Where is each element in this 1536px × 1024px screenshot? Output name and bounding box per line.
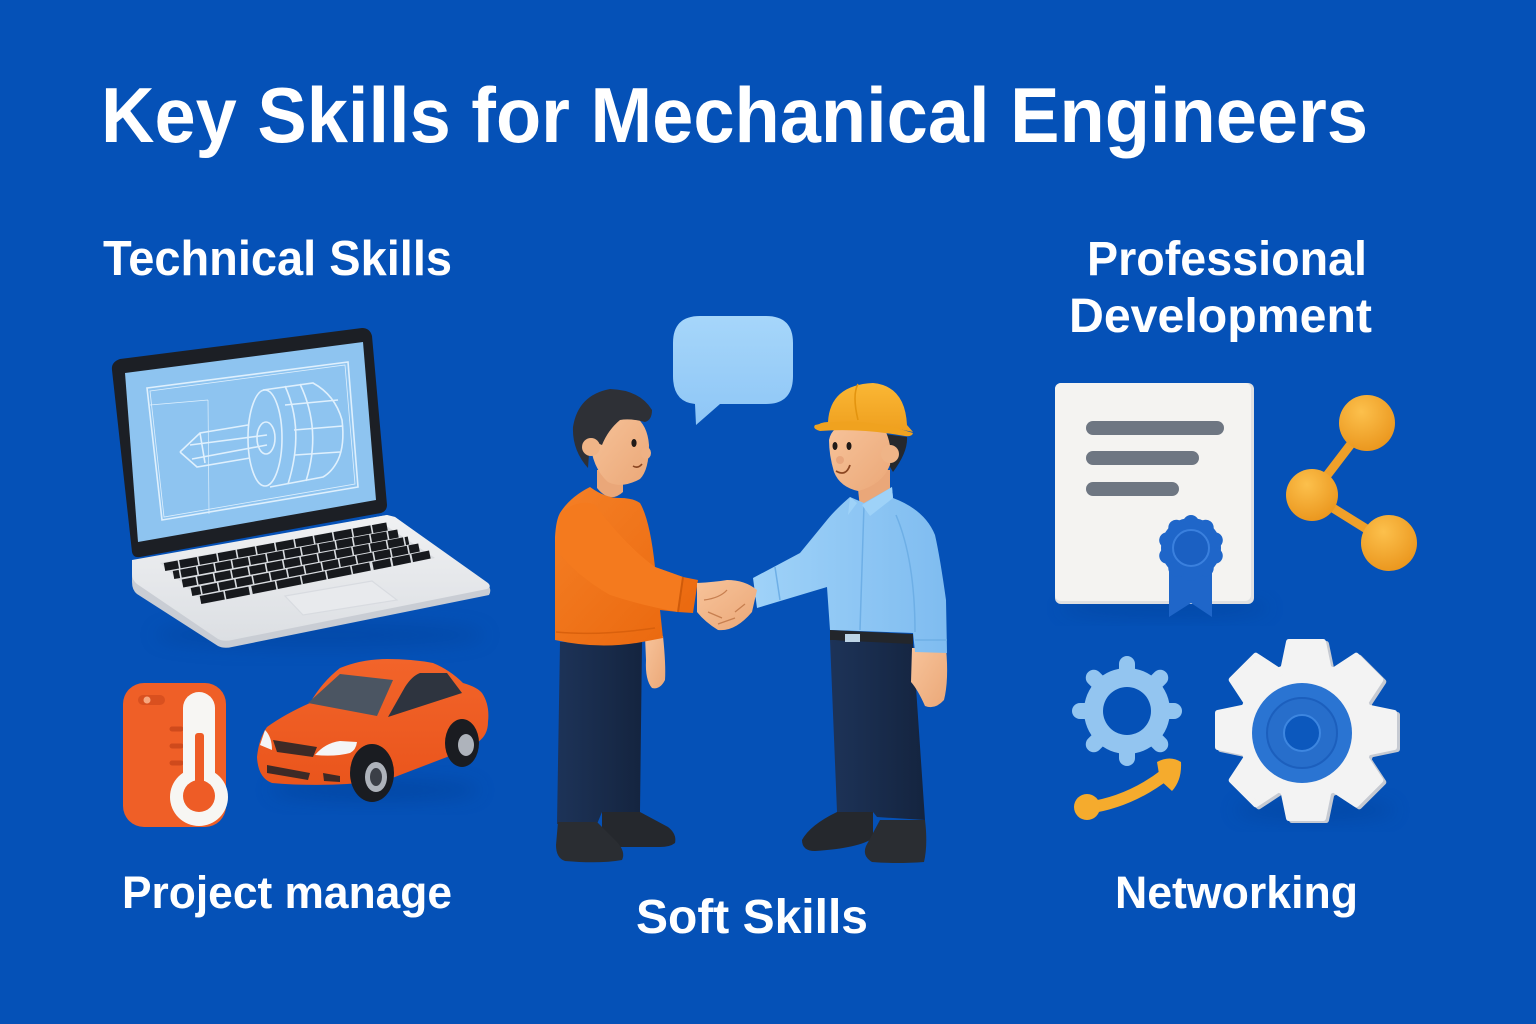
CAD drawing (147, 362, 358, 520)
right person near shoe (865, 820, 926, 863)
handshake (697, 580, 757, 630)
left person face details (631, 439, 637, 447)
car body (257, 659, 488, 785)
left person sweater (555, 487, 698, 646)
label: networking: Networking (1115, 867, 1358, 918)
right person collar (848, 487, 893, 516)
right person legs (830, 640, 925, 820)
right person neck (856, 470, 890, 508)
left person ear (582, 438, 600, 456)
laptop screen (112, 328, 387, 557)
label: soft skills: Soft Skills (636, 891, 868, 944)
icon: car (257, 659, 488, 802)
left person nose (641, 447, 651, 459)
label: project manage: Project manage (122, 867, 452, 918)
icon: large white gear (1218, 642, 1397, 820)
right person hand (911, 648, 947, 707)
hard hat (814, 383, 913, 436)
left person hair (573, 389, 652, 468)
icon: laptop (112, 328, 490, 649)
car windows (308, 674, 393, 716)
ribbon seal (1157, 515, 1225, 617)
car rear wheel (445, 719, 479, 767)
right person far shoe (802, 812, 873, 851)
right person belt (830, 630, 913, 644)
laptop base (132, 515, 490, 648)
person: left, orange sweater (555, 389, 698, 862)
left person sleeve (555, 503, 683, 612)
icon: curved arrow (1074, 758, 1181, 820)
left person legs (557, 642, 642, 824)
left person head (590, 412, 649, 485)
heading: professional development: Professional (1087, 233, 1367, 286)
heading: professional development (1069, 233, 1372, 343)
thermometer body (183, 692, 215, 792)
left person far hand (645, 636, 665, 688)
right person ear (881, 445, 899, 463)
car front wheel (350, 744, 394, 802)
icon: small blue gear (1072, 656, 1182, 766)
icon: network nodes (1286, 395, 1417, 571)
car headlights and grille (315, 741, 357, 756)
heading: professional development: Development (1069, 290, 1372, 343)
right person head (829, 425, 891, 491)
right person face details (832, 442, 838, 450)
left person near shoe (556, 822, 623, 862)
left person neck (597, 470, 623, 497)
left person far shoe (602, 812, 675, 847)
touchpad (285, 581, 397, 615)
person: right, hard hat and blue shirt (753, 383, 947, 863)
title: Key Skills for Mechanical Engineers (101, 71, 1368, 159)
heading: technical skills: Technical Skills (103, 232, 452, 286)
icon: thermometer (123, 683, 228, 827)
icon: certificate (1055, 383, 1270, 617)
right person hair (877, 433, 907, 472)
speech bubble (673, 316, 793, 425)
right person shirt (753, 487, 947, 653)
laptop keyboard (160, 523, 435, 604)
